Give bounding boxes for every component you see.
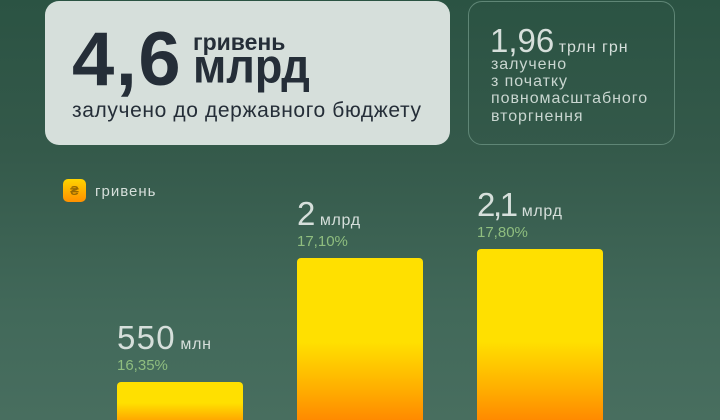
bar: 2,1 млрд: [477, 249, 603, 420]
description: [491, 56, 648, 125]
share: 16,35%: 16,35%: [117, 357, 168, 374]
panel: since the invasion: [468, 1, 675, 145]
bar: 2 млрд: [297, 258, 423, 420]
share: 17,10%: 17,10%: [297, 233, 348, 250]
description: вторгнення: [491, 108, 584, 125]
icon: hryvnia: ₴: [70, 183, 79, 198]
value: 2 млрд: 2 млрд: [297, 195, 361, 232]
share: 17,80%: 17,80%: [477, 224, 528, 241]
description: повномасштабного: [491, 90, 648, 107]
unit: гривень: гривень: [193, 29, 285, 55]
bar chart: [117, 186, 603, 420]
value: 550 млн: 550 млн: [117, 319, 212, 356]
unit: млрд: млрд: [193, 39, 310, 93]
panel: main total: [45, 1, 450, 145]
description: залучено: [491, 56, 567, 73]
caption: залучено до державного бюджету: [72, 99, 422, 122]
icon: hryvnia: [63, 179, 86, 202]
description: з початку: [491, 73, 568, 90]
value: 2,1 млрд: 2,1 млрд: [477, 186, 563, 223]
number 1,96 trillion: 1,96 трлн грн: [490, 22, 629, 59]
bar: 550 млн: [117, 382, 243, 420]
legend label: гривень: [95, 183, 156, 200]
big number 4,6: 4,6: [72, 17, 182, 102]
legend: [63, 179, 156, 202]
